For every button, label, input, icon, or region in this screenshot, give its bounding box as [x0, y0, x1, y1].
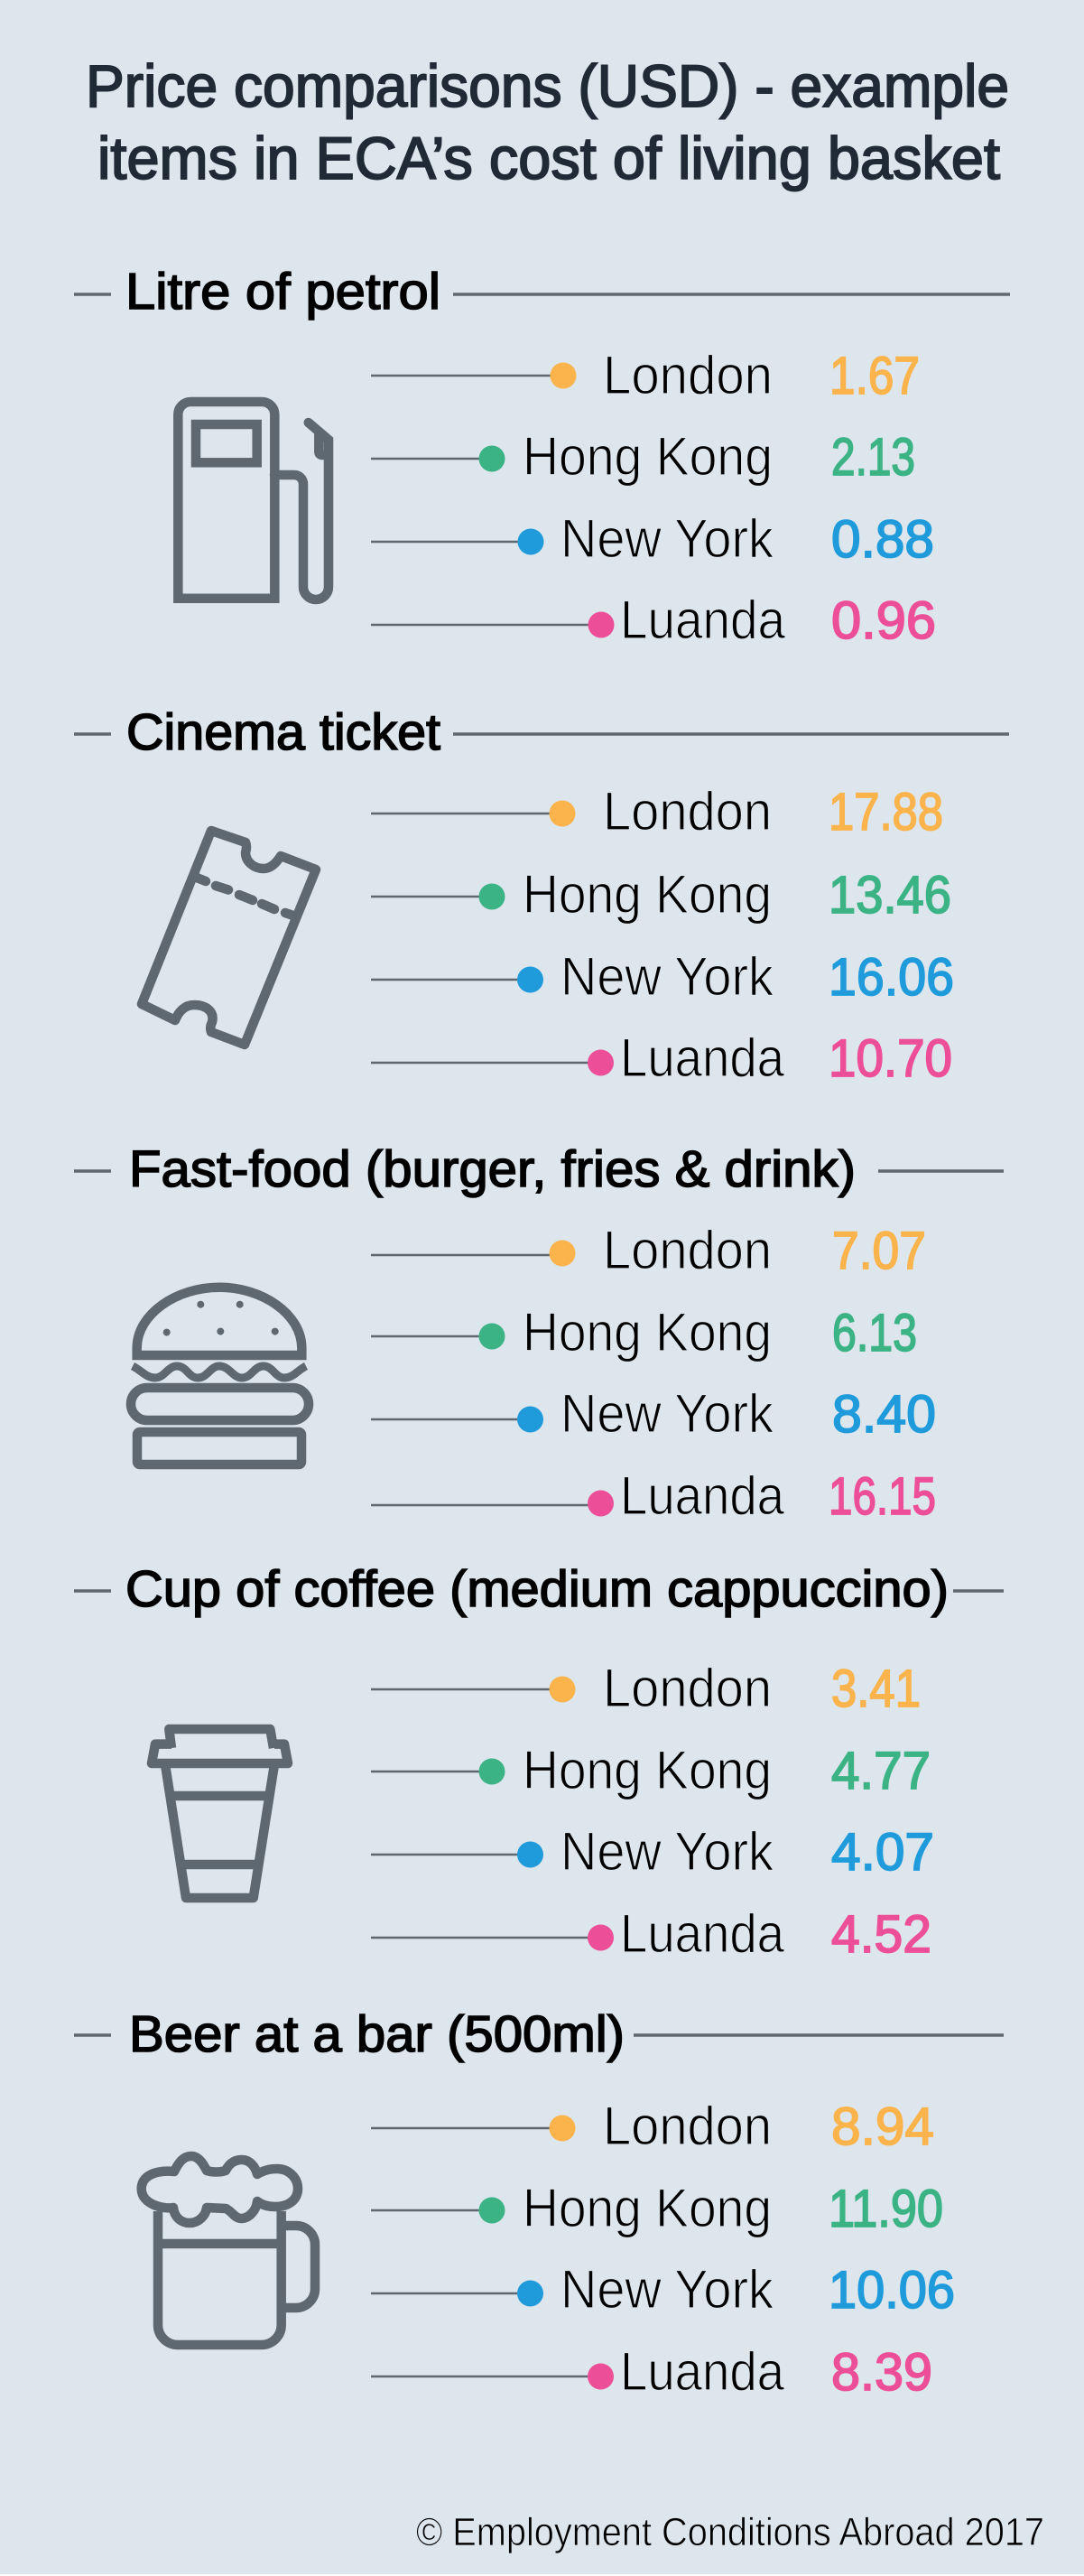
row: London 7.07: 7.07	[832, 1222, 926, 1280]
heading: beer at a bar: Beer at a bar (500ml)	[129, 2005, 625, 2063]
row: London 17.88	[371, 781, 943, 842]
row: Hong Kong 6.13	[371, 1302, 917, 1362]
row: New York 4.07: New York	[561, 1821, 774, 1882]
row: Luanda 0.96: 0.96	[831, 591, 936, 650]
row: London 8.94: London	[603, 2096, 772, 2156]
row: New York 8.40: New York	[561, 1383, 774, 1444]
row: Hong Kong 4.77: 4.77	[831, 1742, 931, 1800]
row: Hong Kong 2.13: Hong Kong	[523, 426, 773, 487]
row: Hong Kong 13.46	[371, 864, 951, 925]
row: New York 16.06	[371, 946, 954, 1007]
panel: cup of coffee	[74, 1560, 1004, 1964]
icon: coffee cup	[152, 1729, 288, 1898]
title: Price comparisons (USD) - example	[86, 52, 1009, 119]
row: London 8.94: 8.94	[831, 2097, 934, 2156]
row: Luanda 16.15: Luanda	[620, 1465, 785, 1526]
row: New York 4.07: 4.07	[831, 1823, 934, 1882]
row: London 1.67: London	[603, 345, 773, 405]
row: London 17.88: London	[603, 781, 772, 842]
icon: burger	[131, 1288, 309, 1465]
row: Hong Kong 2.13	[371, 426, 915, 487]
row: Luanda 4.52: Luanda	[620, 1903, 785, 1964]
row: Luanda 4.52: 4.52	[831, 1905, 931, 1964]
row: London 17.88: 17.88	[829, 783, 943, 842]
row: Luanda 10.70	[371, 1028, 952, 1088]
row: Hong Kong 4.77: Hong Kong	[523, 1740, 772, 1800]
row: Luanda 8.39: Luanda	[620, 2341, 785, 2402]
row: New York 0.88: 0.88	[831, 510, 934, 569]
row: Hong Kong 11.90: 11.90	[829, 2180, 943, 2238]
row: Hong Kong 11.90: Hong Kong	[523, 2178, 772, 2238]
row: Hong Kong 11.90	[371, 2178, 943, 2238]
row: Luanda 0.96	[371, 590, 936, 650]
row: New York 16.06: New York	[561, 946, 774, 1007]
title	[86, 52, 1009, 191]
row: New York 0.88: New York	[561, 508, 774, 569]
heading: fast-food: Fast-food (burger, fries & drink)	[129, 1140, 856, 1198]
row: New York 10.06: New York	[561, 2259, 774, 2320]
row: London 7.07: London	[603, 1220, 772, 1280]
row: Hong Kong 6.13: Hong Kong	[523, 1302, 772, 1362]
row: London 1.67	[371, 345, 920, 405]
panel: beer at a bar	[74, 2005, 1004, 2402]
row: Hong Kong 4.77	[371, 1740, 931, 1800]
icon: petrol pump	[178, 402, 329, 600]
panel: litre of petrol	[74, 263, 1010, 650]
row: New York 8.40	[371, 1383, 936, 1444]
row: London 3.41	[371, 1658, 921, 1718]
panel: cinema ticket	[74, 703, 1009, 1088]
heading: litre of petrol: Litre of petrol	[125, 263, 440, 321]
icon: ticket	[142, 831, 316, 1045]
row: London 1.67: 1.67	[829, 347, 920, 405]
row: London 8.94	[371, 2096, 934, 2156]
heading: cinema ticket: Cinema ticket	[126, 703, 440, 761]
row: Luanda 16.15	[371, 1465, 936, 1526]
row: London 7.07	[371, 1220, 926, 1280]
panel: fast-food	[74, 1140, 1004, 1526]
row: New York 8.40: 8.40	[832, 1385, 936, 1444]
row: New York 10.06	[371, 2259, 955, 2320]
row: Hong Kong 6.13: 6.13	[832, 1304, 917, 1362]
row: New York 16.06: 16.06	[829, 948, 954, 1007]
row: Luanda 4.52	[371, 1903, 931, 1964]
row: London 3.41: London	[603, 1658, 772, 1718]
row: New York 10.06: 10.06	[829, 2261, 955, 2320]
row: Hong Kong 2.13: 2.13	[831, 428, 915, 487]
row: Luanda 8.39: 8.39	[831, 2343, 932, 2402]
row: Hong Kong 13.46: 13.46	[829, 866, 951, 925]
row: Hong Kong 13.46: Hong Kong	[523, 864, 772, 925]
row: Luanda 16.15: 16.15	[829, 1467, 936, 1526]
row: Luanda 10.70: 10.70	[829, 1029, 952, 1088]
heading: cup of coffee: Cup of coffee (medium cappuccino)	[125, 1560, 949, 1618]
row: Luanda 10.70: Luanda	[620, 1028, 785, 1088]
row: New York 0.88	[371, 508, 934, 569]
row: New York 4.07	[371, 1821, 934, 1882]
row: Luanda 8.39	[371, 2341, 932, 2402]
title: items in ECA’s cost of living basket	[97, 125, 1000, 191]
row: Luanda 0.96: Luanda	[620, 590, 786, 650]
icon: beer mug	[142, 2156, 315, 2345]
row: London 3.41: 3.41	[831, 1660, 921, 1718]
